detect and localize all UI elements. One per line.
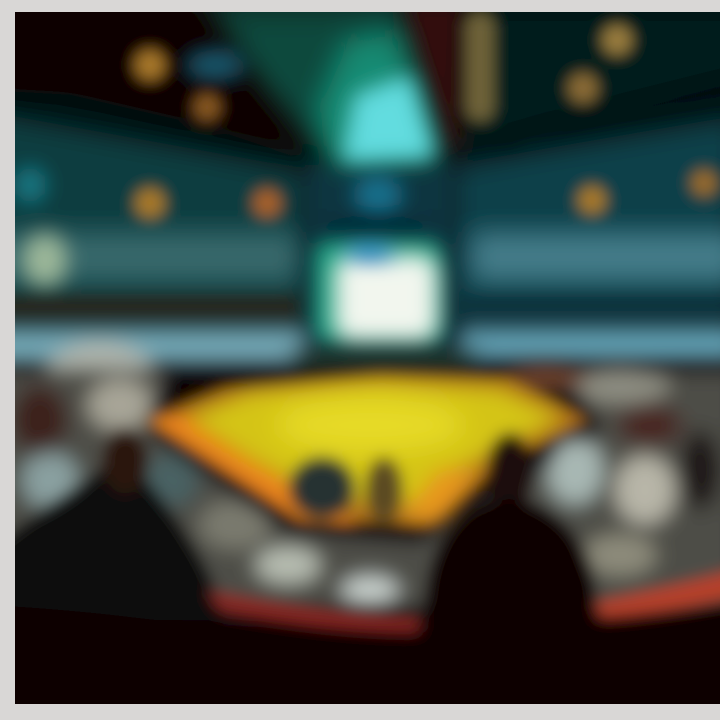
pale audience band — [0, 328, 720, 414]
middle wall band: teal windows — [0, 110, 720, 330]
central column — [305, 165, 455, 355]
audience: mottled crowd — [0, 366, 720, 610]
silhouettes on floor — [290, 458, 402, 522]
red front rail — [205, 568, 720, 632]
lower screen: white — [316, 242, 440, 342]
dark arch over lower screen — [315, 216, 435, 240]
ceiling: dark panels and green glow — [0, 0, 720, 170]
upper screen: cyan green — [315, 30, 438, 165]
stage floor: yellow — [145, 374, 590, 525]
ceiling lights: amber spots — [134, 12, 718, 219]
dark foreground — [15, 602, 720, 644]
small blue screen — [354, 175, 402, 215]
foreground silhouettes — [0, 430, 595, 620]
